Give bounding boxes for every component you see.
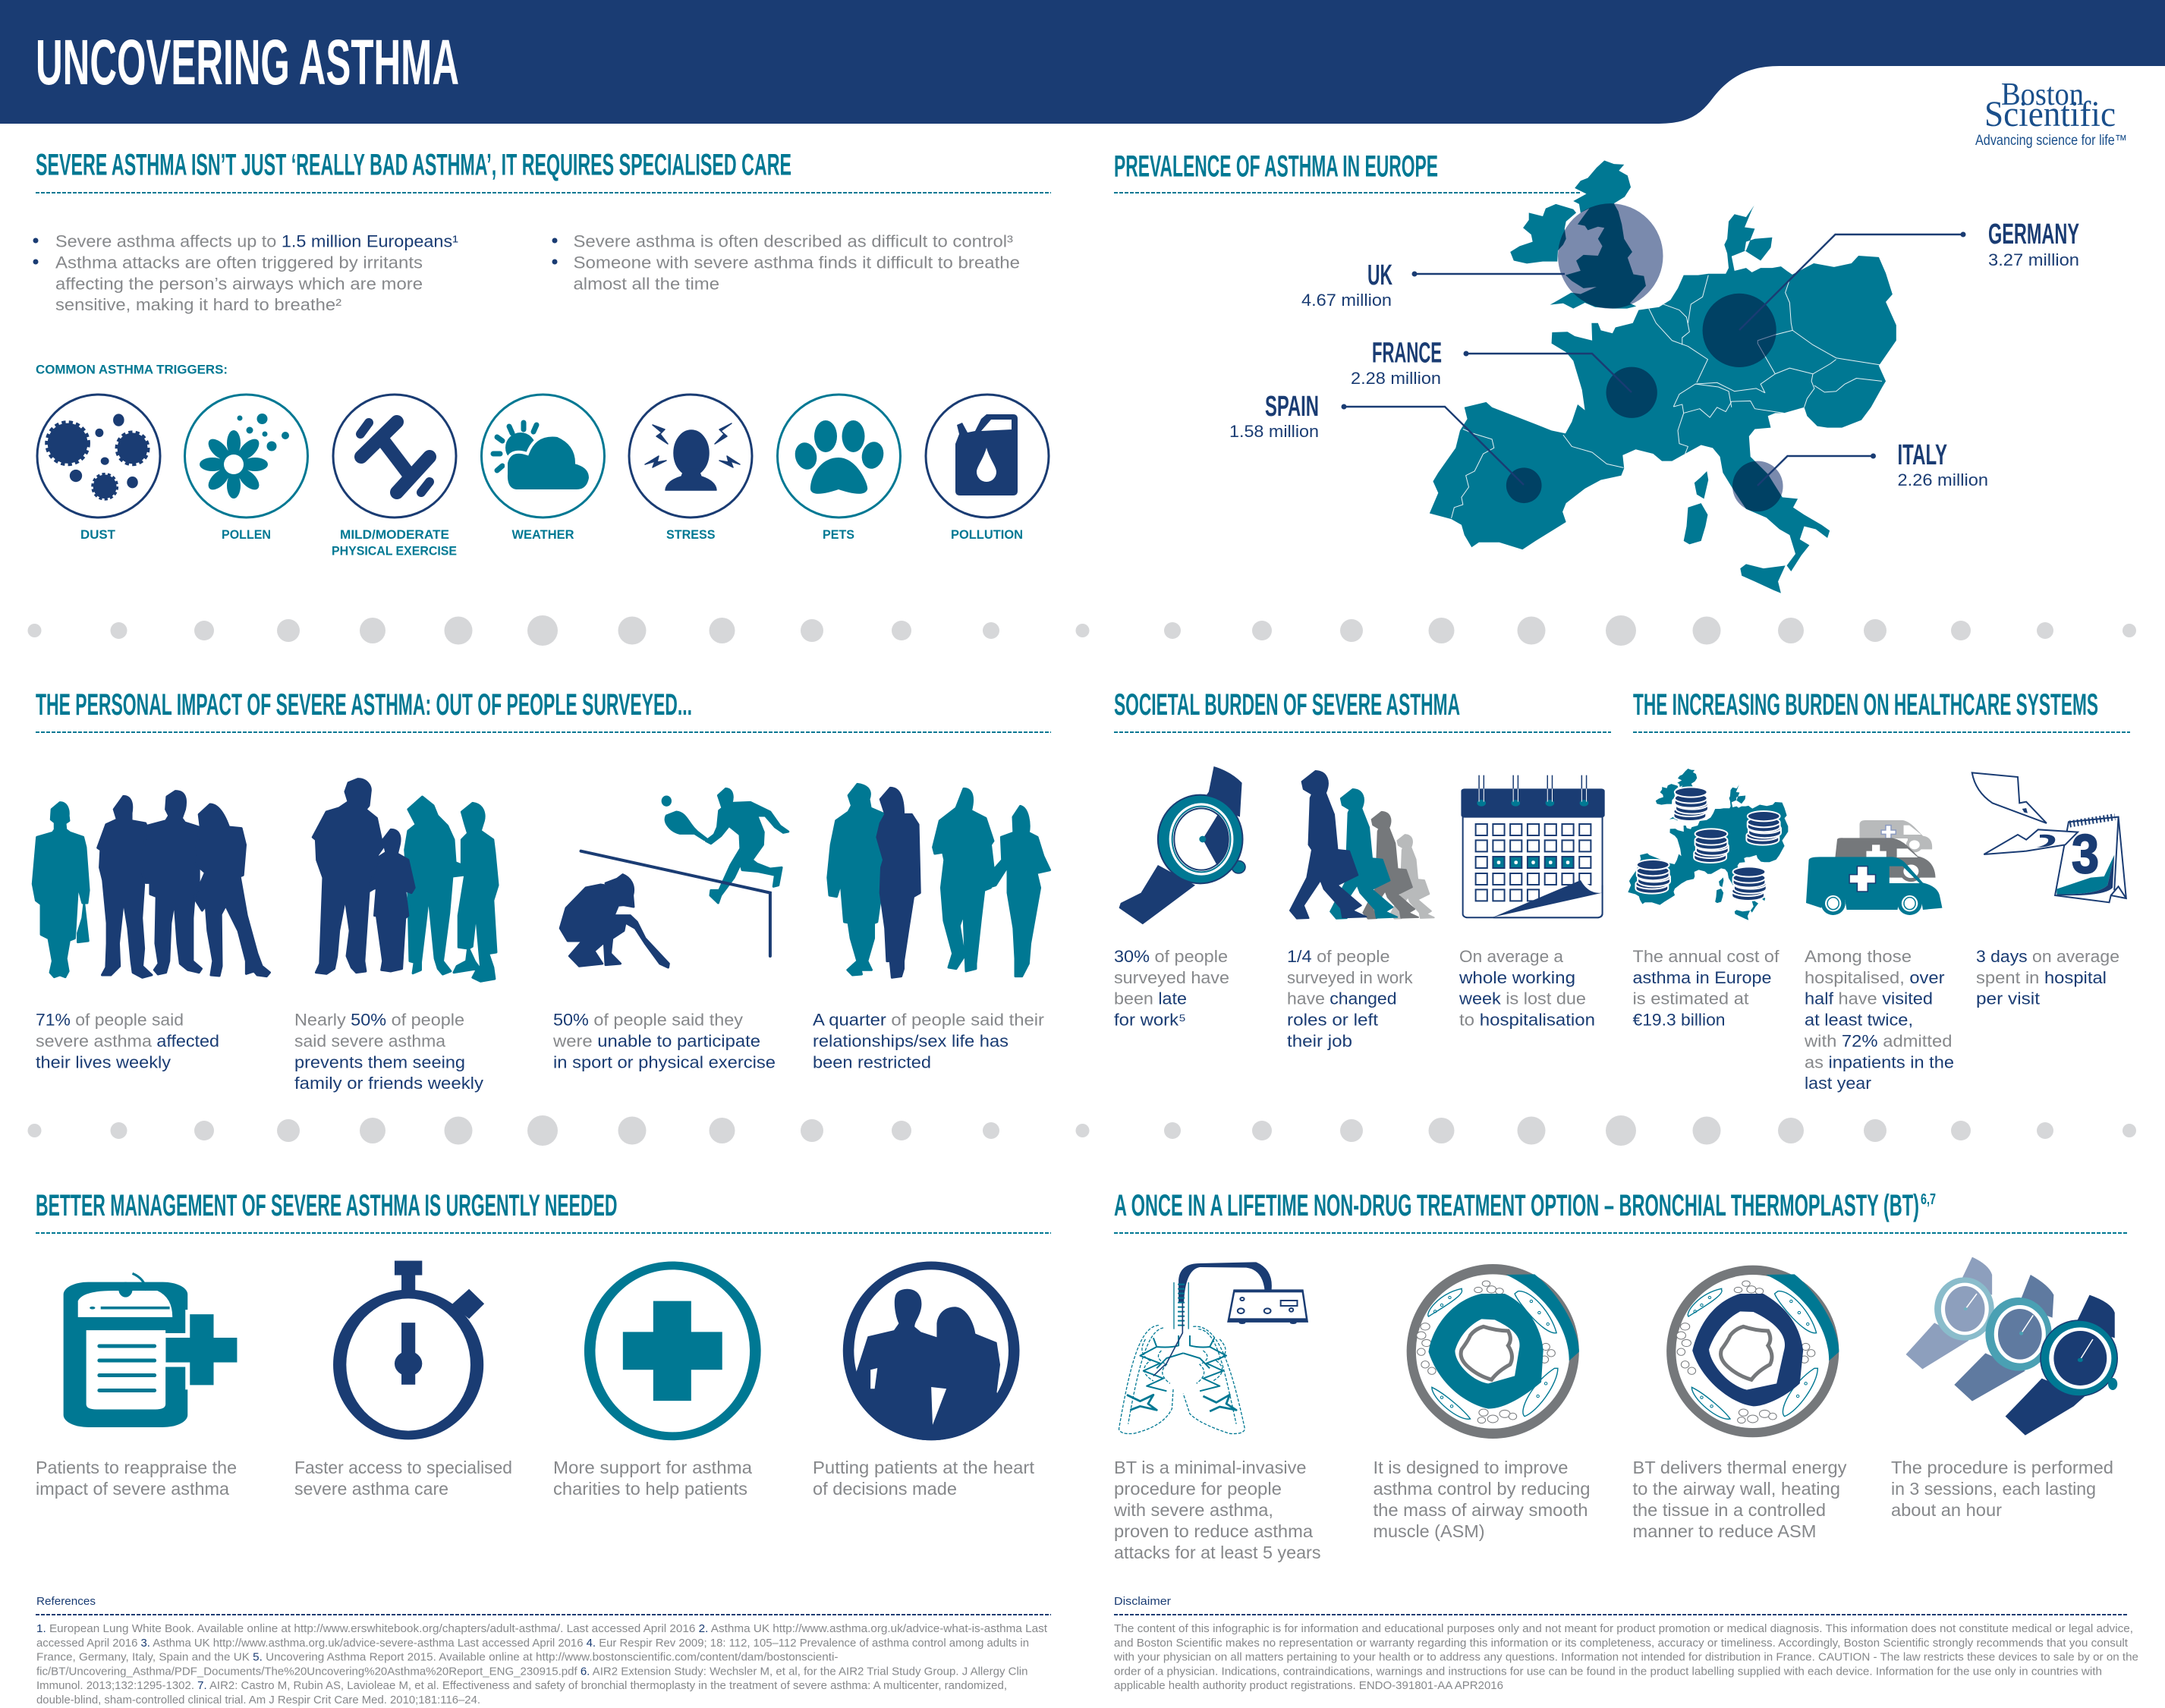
caption: designed to improve: the mass of airway smooth (1374, 1500, 1588, 1520)
text: hospitalised: half have visited (1805, 989, 1933, 1008)
references: Immunol. 2013;132:1295-1302. 7. AIR2: Castro M, Rubin AS, Lavioleae M, et al. Effectiveness and safety of bronchial thermoplasty in the treatment of severe asthma: A multicenter, randomized, (36, 1680, 1007, 1692)
caption: reappraise: Patients to reappraise the (36, 1458, 237, 1477)
icon: pollution (926, 395, 1049, 542)
caption: three sessions: The procedure is performed (1891, 1458, 2113, 1477)
icon: exercise: MILD/MODERATE (340, 528, 449, 542)
text: nearly 50%: said severe asthma (294, 1032, 446, 1050)
icon: lungs and device (1119, 1262, 1307, 1434)
text: 1/4: roles or left (1287, 1011, 1378, 1029)
text: a quarter: relationships/sex life has (813, 1032, 1009, 1050)
icon: tear-off calendar: 3 (2072, 824, 2099, 885)
callout: France (1351, 337, 1632, 392)
caption: three sessions: in 3 sessions, each lasting (1891, 1479, 2096, 1499)
icon: weather (481, 395, 604, 542)
text: 71% (36, 1011, 219, 1071)
heading: bronchial thermoplasty: 6,7 (1921, 1191, 1936, 1208)
heading: personal impact: THE PERSONAL IMPACT OF SEVERE ASTHMA: OUT OF PEOPLE SURVEYED... (36, 688, 692, 722)
disclaimer: order of a physician. Indications, contraindications, warnings and instructions for use can be found in the product labelling supplied with each device. Information for the use only in countries with (1114, 1666, 2102, 1678)
panel: personal impact (33, 688, 1051, 1093)
references: accessed April 2016 3. Asthma UK http://www.asthma.org.uk/advice-severe-asthma Last accessed April 2016 4. Eur Respir Rev 2009; 18: 112, 105–112 Prevalence of asthma control among adults in (36, 1637, 1029, 1650)
text: hospitalised: at least twice, (1805, 1011, 1913, 1029)
icon: pollution: POLLUTION (951, 528, 1023, 542)
icon: stress: STRESS (666, 528, 715, 542)
text: 30%: been late (1114, 989, 1187, 1008)
icon: three watches (1906, 1257, 2117, 1436)
text: hospitalised: hospitalised, over (1805, 968, 1944, 987)
heading: prevalence: PREVALENCE OF ASTHMA IN EUROPE (1114, 150, 1438, 184)
icon: dust (37, 395, 160, 542)
icon: stress (629, 395, 752, 542)
icon: walking women (1290, 771, 1434, 919)
text: 1/4: have changed (1287, 989, 1396, 1008)
bullets left: Asthma attacks are often triggered by irritants (55, 253, 423, 272)
title: UNCOVERING ASTHMA (36, 27, 459, 98)
logo: Boston Scientific: Advancing science for life™ (1975, 133, 2127, 149)
heading: societal: SOCIETAL BURDEN OF SEVERE ASTHMA (1114, 688, 1460, 722)
text: a quarter (813, 1011, 1044, 1071)
bullets right: almost all the time (574, 275, 719, 293)
text: 50%: in sport or physical exercise (553, 1053, 776, 1071)
silhouettes: group of four (33, 791, 269, 977)
text: hospitalised: with 72% admitted (1804, 1032, 1952, 1050)
caption: patients at heart: Putting patients at the heart (813, 1458, 1035, 1477)
caption: faster access: Faster access to specialised (294, 1458, 512, 1477)
panel: severe asthma (33, 149, 1051, 376)
caption: designed to improve: It is designed to improve (1374, 1458, 1568, 1477)
caption: minimal-invasive (1113, 1458, 1320, 1562)
text: 50% (552, 1011, 776, 1071)
text: annual cost (1633, 947, 1780, 1029)
text: nearly 50%: family or friends weekly (294, 1074, 483, 1093)
text: 1/4: 1/4 of people (1287, 947, 1390, 966)
icon: dust: DUST (80, 528, 115, 542)
icon: exercise: PHYSICAL EXERCISE (332, 545, 457, 558)
icon: weather: WEATHER (511, 528, 574, 542)
icon: pollen (185, 395, 308, 542)
icon: airway cross-section teal (1407, 1264, 1579, 1439)
caption: three sessions (1891, 1458, 2113, 1520)
caption: thermal energy: the tissue in a controlled (1633, 1500, 1826, 1520)
callout: UK (1301, 260, 1565, 310)
text: 30% (1114, 947, 1229, 1029)
caption: minimal-invasive: procedure for people (1114, 1479, 1282, 1499)
caption: designed to improve: asthma control by reducing (1374, 1479, 1591, 1499)
disclaimer: and Boston Scientific makes no representation or warranty regarding this information or its completeness, accuracy or timeliness. Accordingly, Boston Scientific strongly recommends that you consult (1114, 1637, 2128, 1650)
caption: patients at heart: of decisions made (813, 1479, 957, 1499)
icon: medical cross (584, 1261, 761, 1440)
icon: Europe with coins (1628, 769, 1788, 920)
bullets left: sensitive, making it hard to breathe² (55, 295, 341, 314)
silhouettes: couples (828, 784, 1050, 977)
callout: France: FRANCE (1372, 337, 1442, 369)
text: 3 days: spent in hospital (1976, 968, 2107, 987)
text: 71%: 71% of people said (36, 1011, 184, 1029)
text: whole working week: week is lost due (1459, 989, 1586, 1008)
text: annual cost: asthma in Europe (1633, 968, 1771, 987)
text: hospitalised: Among those (1805, 947, 1912, 966)
callout: France: 2.28 million (1351, 369, 1441, 388)
text: whole working week: On average a (1459, 947, 1564, 966)
caption: more support: charities to help patients (553, 1479, 747, 1499)
icon: ambulances (1806, 820, 1942, 915)
caption: designed to improve: muscle (ASM) (1374, 1521, 1484, 1541)
callout: UK: UK (1367, 260, 1392, 291)
text: 50%: were unable to participate (552, 1032, 760, 1050)
disclaimer: applicable health authority product registrations. ENDO-391801-AA APR2016 (1114, 1680, 1503, 1692)
references: France, Germany, Italy, Spain and the UK 5. Uncovering Asthma Report 2015. Available online at http://www.bostonscientific.com/content/dam/bostonscienti- (36, 1651, 839, 1663)
triggers label: COMMON ASTHMA TRIGGERS: (36, 363, 228, 376)
icon: pets (777, 395, 900, 542)
text: annual cost: The annual cost of (1633, 947, 1780, 966)
logo: Boston Scientific: Boston (2001, 77, 2084, 112)
caption: minimal-invasive: with severe asthma, (1113, 1500, 1273, 1520)
text: a quarter: A quarter of people said their (813, 1011, 1044, 1029)
bullets right: Severe asthma is often described as difficult to control³ (574, 232, 1013, 250)
caption: more support (553, 1458, 752, 1499)
icon: clipboard (64, 1273, 239, 1427)
text: 71%: their lives weekly (36, 1053, 171, 1071)
heading: severe asthma: SEVERE ASTHMA ISN’T JUST ‘REALLY BAD ASTHMA’, IT REQUIRES SPECIALISED CARE (36, 149, 791, 182)
text: 30%: surveyed have (1114, 968, 1229, 987)
header banner (0, 0, 2165, 124)
text: 50%: 50% of people said they (553, 1011, 743, 1029)
text: annual cost: is estimated at (1633, 989, 1748, 1008)
caption: more support: More support for asthma (553, 1458, 752, 1477)
silhouettes: family (313, 779, 498, 981)
disclaimer (1113, 1595, 2138, 1692)
text: 1/4: surveyed in work (1287, 968, 1413, 987)
disclaimer: The content of this infographic is for information and educational purposes only and not meant for product promotion or medical diagnosis. This information does not constitute medical or legal advice, (1114, 1623, 2133, 1635)
callout: Germany: 3.27 million (1988, 250, 2079, 269)
caption: patients at heart (813, 1458, 1035, 1499)
callout: Germany (1739, 219, 2079, 330)
text: whole working week: whole working (1459, 968, 1575, 987)
text: 1/4: their job (1287, 1032, 1352, 1050)
text: hospitalised (1804, 947, 1954, 1093)
silhouettes: sport (560, 788, 788, 967)
callout: Spain (1229, 391, 1524, 485)
icon: tear-off calendar (1972, 772, 2126, 902)
callout: Spain: 1.58 million (1229, 422, 1319, 441)
callout: Germany: GERMANY (1988, 219, 2079, 250)
bullets left: Severe asthma affects up to 1.5 million Europeans¹ (55, 232, 458, 250)
panel: bronchial thermoplasty (1113, 1189, 2129, 1562)
caption: reappraise: impact of severe asthma (36, 1479, 229, 1499)
caption: thermal energy: BT delivers thermal energy (1633, 1458, 1847, 1477)
caption: faster access (294, 1458, 512, 1499)
callout: Spain: SPAIN (1265, 391, 1319, 423)
logo: Boston Scientific: Scientific (1984, 94, 2116, 134)
disclaimer: Disclaimer (1114, 1595, 1171, 1608)
bullets right: Someone with severe asthma finds it difficult to breathe (574, 253, 1020, 272)
callout: Italy: 2.26 million (1897, 470, 1988, 489)
icon: pets: PETS (823, 528, 854, 542)
icon: stopwatch (333, 1261, 484, 1439)
caption: reappraise (36, 1458, 237, 1499)
icon: pollen: POLLEN (222, 528, 271, 542)
heading: better management: BETTER MANAGEMENT OF SEVERE ASTHMA IS URGENTLY NEEDED (36, 1189, 618, 1222)
icon: couple in circle (842, 1261, 1021, 1444)
text: whole working week: to hospitalisation (1459, 1011, 1595, 1029)
text: 30%: for work⁵ (1114, 1011, 1186, 1029)
map of Europe (1430, 160, 1896, 593)
references: double-blind, sham-controlled clinical trial. Am J Respir Crit Care Med. 2010;181:116–24. (36, 1694, 480, 1706)
text: 71%: severe asthma affected (36, 1032, 219, 1050)
text: nearly 50%: Nearly 50% of people (294, 1011, 464, 1029)
references: References (36, 1595, 96, 1608)
caption: designed to improve (1374, 1458, 1591, 1541)
caption: minimal-invasive: attacks for at least 5 years (1114, 1543, 1320, 1562)
references: fic/BT/Uncovering_Asthma/PDF_Documents/The%20Uncovering%20Asthma%20Report_ENG_230915.pdf 6. AIR2 Extension Study: Wechsler M, et al, for the AIR2 Trial Study Group. J Allergy Clin (36, 1666, 1027, 1678)
callout: UK: 4.67 million (1301, 291, 1392, 310)
caption: three sessions: about an hour (1891, 1500, 2002, 1520)
caption: minimal-invasive: BT is a minimal-invasive (1114, 1458, 1307, 1477)
references (36, 1595, 1051, 1706)
text: nearly 50%: prevents them seeing (294, 1053, 465, 1071)
text: 30%: 30% of people (1114, 947, 1228, 966)
caption: minimal-invasive: proven to reduce asthma (1114, 1521, 1313, 1541)
panel: societal burden (1114, 688, 1611, 1050)
icon: airway cross-section navy (1666, 1266, 1839, 1437)
text: whole working week (1459, 947, 1595, 1029)
text: hospitalised: as inpatients in the (1805, 1053, 1954, 1071)
text: 1/4 (1287, 947, 1413, 1050)
caption: thermal energy: to the airway wall, heating (1633, 1479, 1840, 1499)
bullets right (552, 232, 1020, 293)
panel: better management (36, 1189, 1051, 1499)
text: a quarter: been restricted (813, 1053, 931, 1071)
text: hospitalised: last year (1805, 1074, 1871, 1093)
disclaimer: with your physician on all matters pertaining to your health or to address any questions. Information not intended for distribution in France. CAUTION - The law restricts these devices to sale by or on the (1113, 1651, 2138, 1663)
logo: Boston Scientific (1975, 77, 2127, 149)
text: 3 days: 3 days on average (1976, 947, 2119, 966)
text: annual cost: €19.3 billion (1633, 1011, 1726, 1029)
text: 3 days: per visit (1976, 989, 2040, 1008)
callout: Italy: ITALY (1897, 439, 1947, 471)
icon: calendar (1461, 775, 1605, 917)
icon: exercise (332, 395, 457, 558)
bullets left (33, 232, 458, 314)
text: nearly 50% (294, 1011, 483, 1093)
caption: thermal energy (1633, 1458, 1847, 1541)
dot divider 2 (27, 1115, 2136, 1146)
bullets left: affecting the person’s airways which are more (55, 275, 423, 293)
dot divider 1 (27, 615, 2136, 646)
caption: faster access: severe asthma care (294, 1479, 448, 1499)
icon: watch (1119, 766, 1245, 924)
text: 3 days (1976, 947, 2119, 1008)
references: 1. European Lung White Book. Available online at http://www.erswhitebook.org/chapters/adult-asthma/. Last accessed April 2016 2. Asthma UK http://www.asthma.org.uk/advice-what-is-asthma Last (36, 1623, 1047, 1635)
callout: Italy (1757, 439, 1988, 489)
panel: healthcare burden (1628, 688, 2130, 1093)
caption: thermal energy: manner to reduce ASM (1633, 1521, 1817, 1541)
